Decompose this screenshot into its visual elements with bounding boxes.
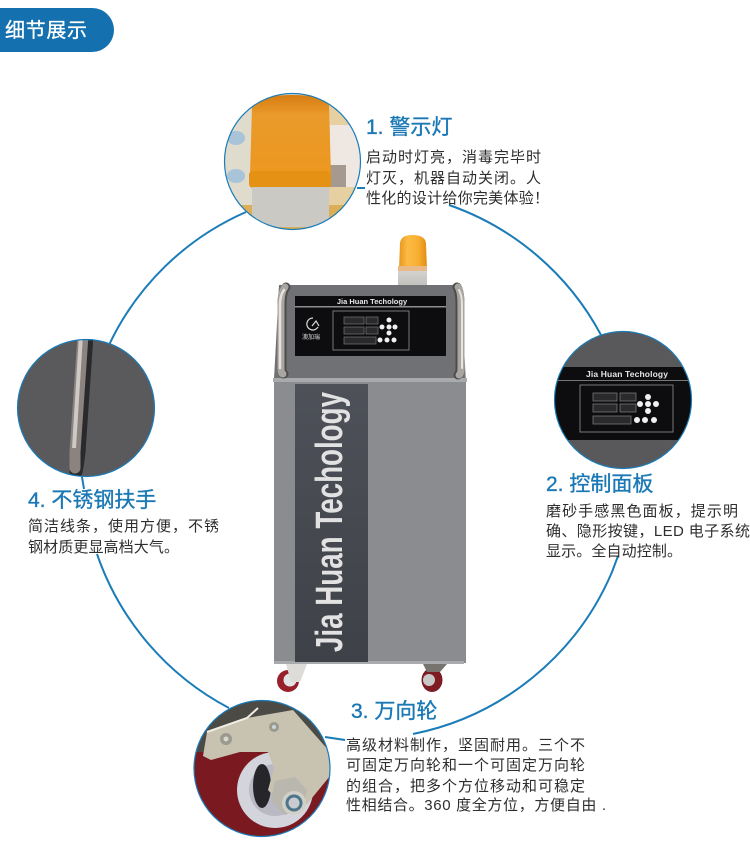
detail text: 4 stainless handle: 简洁线条，使用方便，不锈 bbox=[28, 518, 219, 535]
detail text: 1 warning lamp: 灯灭，机器自动关闭。人 bbox=[366, 170, 541, 187]
detail text: 1 warning lamp: 启动时灯亮，消毒完毕时 bbox=[366, 149, 541, 166]
detail text: 4 stainless handle: 4. 不锈钢扶手 bbox=[28, 489, 156, 512]
machine vertical brand text: Jia Huan Techology bbox=[309, 392, 351, 652]
header tab: 细节展示 bbox=[5, 19, 87, 42]
detail text: 3 caster wheel: 的组合，把多个方位移动和可稳定 bbox=[346, 778, 585, 795]
detail text: 1 warning lamp: 1. 警示灯 bbox=[366, 116, 452, 139]
detail text: 2 control panel: 显示。全自动控制。 bbox=[546, 542, 682, 560]
detail text: 3 caster wheel: 3. 万向轮 bbox=[351, 700, 437, 723]
detail text: 2 control panel: 确、隐形按键，LED 电子系统 bbox=[546, 523, 750, 540]
machine handles bbox=[280, 287, 462, 375]
machine body bbox=[273, 285, 467, 664]
detail text: 1 warning lamp bbox=[366, 116, 549, 207]
header tab bbox=[0, 8, 114, 52]
machine control panel: 澳加瑞 bbox=[302, 333, 320, 341]
detail circle: control panel bbox=[554, 331, 692, 469]
detail text: 1 warning lamp: 性化的设计给你完美体验！ bbox=[366, 190, 549, 207]
warning lamp on machine bbox=[398, 235, 427, 286]
circular connector ring bbox=[82, 188, 618, 740]
detail text: 3 caster wheel: 可固定万向轮和一个可固定万向轮 bbox=[346, 757, 585, 774]
detail circle: warning lamp bbox=[224, 93, 362, 231]
machine casters bbox=[277, 664, 447, 692]
detail text: 3 caster wheel: 性相结合。360 度全方位，方便自由 . bbox=[346, 796, 606, 814]
machine control panel: Jia Huan Techology bbox=[337, 297, 408, 306]
detail text: 4 stainless handle: 钢材质更显高档大气。 bbox=[28, 539, 179, 556]
machine bbox=[273, 235, 467, 692]
detail circle: control panel: Jia Huan Techology bbox=[586, 369, 668, 379]
machine control panel bbox=[295, 296, 446, 356]
detail text: 2 control panel: 2. 控制面板 bbox=[546, 473, 653, 496]
detail text: 2 control panel bbox=[546, 473, 750, 560]
detail text: 3 caster wheel bbox=[346, 700, 606, 814]
detail text: 2 control panel: 磨砂手感黑色面板，提示明 bbox=[546, 502, 738, 520]
detail text: 4 stainless handle bbox=[28, 489, 219, 556]
detail circle: caster wheel bbox=[193, 700, 331, 838]
detail text: 3 caster wheel: 高级材料制作，坚固耐用。三个不 bbox=[346, 737, 585, 754]
detail circle: stainless handle bbox=[17, 335, 155, 477]
